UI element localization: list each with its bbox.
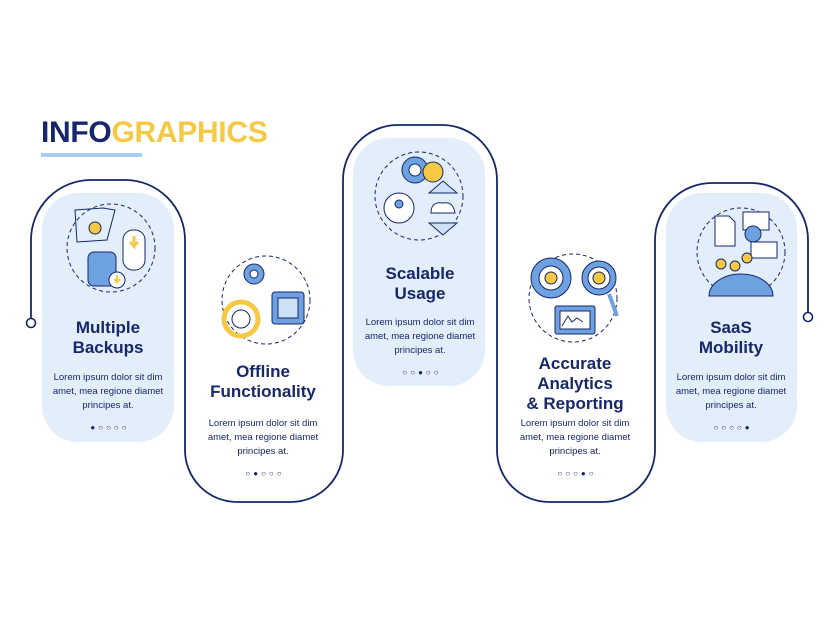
heading: & Reporting — [526, 394, 624, 413]
icon: backups — [66, 204, 156, 292]
heading — [386, 264, 454, 303]
heading — [73, 318, 143, 357]
icon: scalable — [374, 152, 464, 240]
panel: offline functionality — [208, 256, 318, 478]
heading: Scalable — [386, 264, 454, 283]
heading: Usage — [394, 284, 446, 303]
heading: Accurate — [539, 354, 611, 373]
dots: ○○●○○ — [402, 368, 442, 377]
title: INFOGRAPHICS — [41, 116, 267, 149]
dots: ●○○○○ — [90, 423, 130, 432]
text block: Lorem ipsum dolor sit dim amet, mea regione diamet principes at. — [365, 317, 475, 356]
heading: Backups — [73, 338, 143, 357]
text block: Lorem ipsum dolor sit dim amet, mea regione diamet principes at. — [208, 418, 318, 457]
heading — [526, 354, 624, 413]
panel: accurate analytics — [520, 254, 630, 478]
panel: scalable usage — [365, 152, 476, 377]
text block: Lorem ipsum dolor sit dim amet, mea regione diamet principes at. — [53, 372, 163, 411]
heading: Multiple — [76, 318, 140, 337]
icon: offline — [222, 256, 310, 344]
heading: Functionality — [210, 382, 316, 401]
heading — [210, 362, 316, 401]
panel: saas mobility — [676, 208, 786, 432]
dots: ○●○○○ — [245, 469, 285, 478]
text block: Lorem ipsum dolor sit dim amet, mea regione diamet principes at. — [676, 372, 786, 411]
panel: multiple backups — [53, 204, 164, 432]
text block: Lorem ipsum dolor sit dim amet, mea regione diamet principes at. — [520, 418, 630, 457]
heading: Offline — [236, 362, 290, 381]
icon: analytics — [528, 254, 619, 342]
heading: SaaS — [710, 318, 752, 337]
dots: ○○○●○ — [557, 469, 597, 478]
dots: ○○○○● — [713, 423, 753, 432]
heading: Analytics — [537, 374, 613, 393]
icon: saas — [696, 208, 786, 296]
heading: Mobility — [699, 338, 763, 357]
heading — [699, 318, 763, 357]
